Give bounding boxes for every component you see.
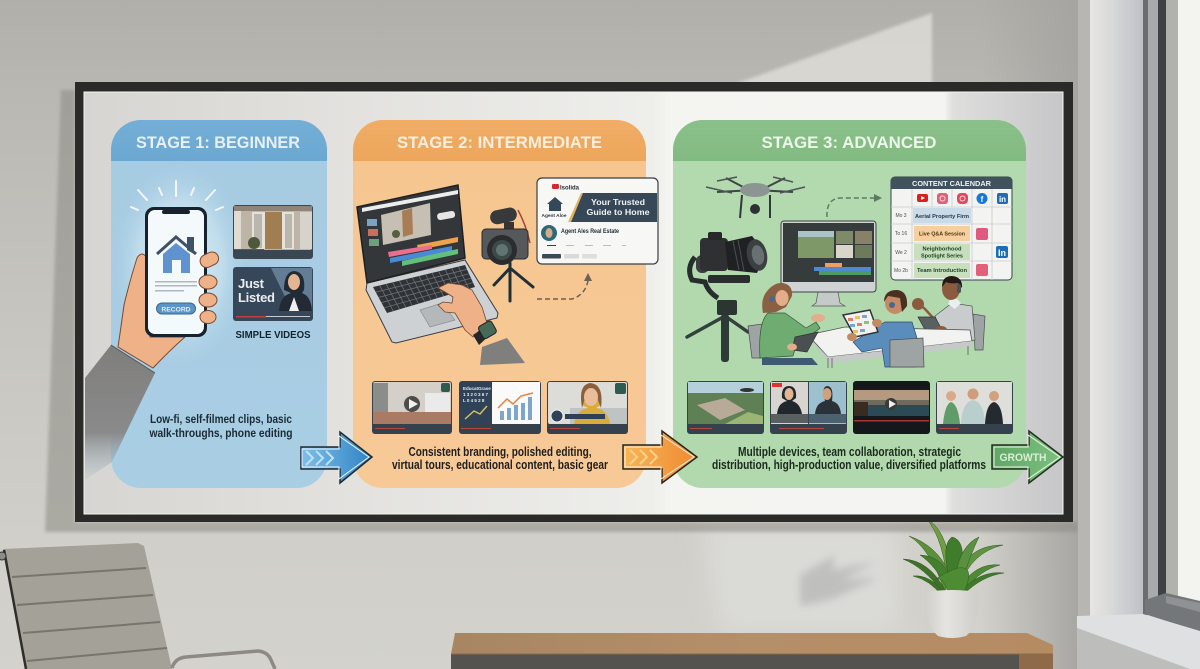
panel: stage 2 intermediate: [353, 120, 658, 488]
icon: house: [157, 237, 196, 273]
sunbeam on wall: [735, 13, 932, 84]
channel banner: Guide to Home: [586, 207, 650, 217]
video thumbnail: educational chart: EducatGrase: [463, 386, 491, 391]
stage 1 description: [149, 412, 292, 440]
illustration: editing monitor: [781, 221, 876, 306]
panel: stage 1 beginner: [85, 120, 327, 488]
calendar dates: Mo 2b: [894, 268, 908, 274]
illustration: team meeting: [748, 276, 985, 368]
stage 1 description: walk-throughs, phone editing: [149, 426, 292, 440]
wooden console table: [451, 633, 1053, 669]
stage 3 description: Multiple devices, team collaboration, strategic: [738, 445, 961, 459]
calendar entries: Spotlight Series: [921, 254, 963, 260]
calendar grid: [891, 189, 1012, 280]
calendar dates: To 16: [895, 231, 907, 237]
office chair: [0, 543, 275, 669]
window sill: [1077, 614, 1200, 669]
calendar entries: Live Q&A Session: [919, 232, 965, 238]
arrow: stage 1 to stage 2: [301, 432, 372, 483]
dashed arrow to channel: [537, 273, 592, 299]
illustration: camera with microphone: [482, 206, 533, 301]
panel: stage 3 advanced: [673, 120, 1026, 488]
illustration: hand back: [118, 254, 185, 368]
video thumbnail: educational chart: L 0 4 5 2 8: [463, 398, 485, 403]
video thumbnail: just listed: [233, 267, 313, 321]
video thumbnail: production team: [936, 381, 1013, 434]
video thumbnail: educational chart: 1 3 2 0 3 6 7: [463, 392, 489, 397]
dashed arrow to calendar: [827, 194, 882, 217]
content calendar: [891, 177, 1012, 280]
video thumbnail: just listed: Listed: [238, 290, 275, 305]
keyboard: [373, 265, 475, 313]
illustration: fingers: [198, 250, 221, 324]
platform icons: in: [999, 195, 1006, 204]
platform icons: f: [981, 195, 984, 204]
right team member: [912, 276, 975, 343]
agent avatar and name: Agent Ales Real Estate: [561, 229, 620, 235]
trackpad: [420, 303, 455, 327]
stage 2 title: STAGE 2: INTERMEDIATE: [397, 134, 602, 152]
calendar entries: Neighborhood: [922, 246, 962, 252]
video thumbnail: aerial property: [687, 381, 764, 434]
illustration: camera on gimbal and tripod: [687, 232, 770, 362]
channel banner: Your Trusted: [591, 197, 645, 207]
stage 2 description: Consistent branding, polished editing,: [408, 445, 592, 459]
window alcove and frame: [1077, 0, 1200, 669]
video thumbnail: pool at dusk: [853, 381, 930, 434]
calendar dates: Mo 3: [895, 213, 907, 219]
stage 3 description: distribution, high-production value, diversified platforms: [712, 458, 986, 472]
video thumbnail: live interview: [770, 381, 847, 434]
illustration: phone: [145, 207, 207, 337]
calendar social tiles: In: [998, 248, 1006, 258]
calendar dates: [894, 213, 908, 274]
icon: youtube logo: Isolida: [560, 186, 580, 192]
channel banner: [568, 193, 657, 222]
platform icons: [917, 193, 1008, 204]
framed board: [75, 82, 1073, 522]
stage 3 description: [712, 445, 986, 472]
stage 3 title: STAGE 3: ADVANCED: [762, 134, 937, 152]
label: simple videos: SIMPLE VIDEOS: [236, 329, 310, 341]
illustration: typing hand: [438, 283, 525, 365]
middle team member: [843, 290, 924, 367]
illustration: laptop: [357, 185, 498, 343]
stage 2 description: [392, 445, 608, 472]
icon: light rays: [131, 181, 223, 210]
video thumbnail: front door: [233, 205, 313, 259]
pot: [926, 590, 978, 638]
calendar title: CONTENT CALENDAR: [912, 179, 992, 188]
video thumbnail: educational chart: [459, 381, 541, 434]
potted plant: [903, 518, 1004, 638]
meeting table: [808, 327, 972, 357]
stage 1 description: Low-fi, self-filmed clips, basic: [150, 412, 292, 426]
chairs: [748, 314, 985, 358]
presenter: [279, 271, 312, 311]
phone glow: [110, 160, 250, 370]
video thumbnail: presenter: [547, 381, 628, 434]
stage 2 header band: [353, 120, 646, 161]
stage 1 title: STAGE 1: BEGINNER: [136, 134, 300, 152]
arrow: stage 2 to stage 3: [623, 431, 697, 483]
stage 1 header band: [111, 120, 327, 161]
calendar entries: Team Introduction: [917, 268, 967, 274]
arrow: growth: [992, 431, 1063, 483]
growth label: GROWTH: [1000, 452, 1047, 464]
channel page card: [537, 178, 658, 264]
illustration: arm sleeve: [85, 345, 155, 480]
record button: RECORD: [162, 306, 191, 314]
illustration: drone: [706, 177, 805, 218]
left team member: [760, 283, 825, 365]
smartwatch: [473, 320, 497, 345]
frame drop shadow: [45, 90, 1078, 532]
plant shadow on wall: [800, 555, 878, 605]
calendar entries: Aerial Property Firm: [915, 214, 969, 220]
agent house logo: Agent Aloe: [542, 213, 567, 219]
video thumbnail: virtual tour: [372, 381, 452, 434]
calendar dates: We 2: [895, 250, 907, 256]
stage 3 header band: [673, 120, 1026, 161]
calendar entries: [913, 208, 971, 278]
leaves: [903, 518, 1004, 596]
stage 2 description: virtual tours, educational content, basic gear: [392, 458, 608, 472]
thumbnail text: Just: [238, 276, 265, 291]
